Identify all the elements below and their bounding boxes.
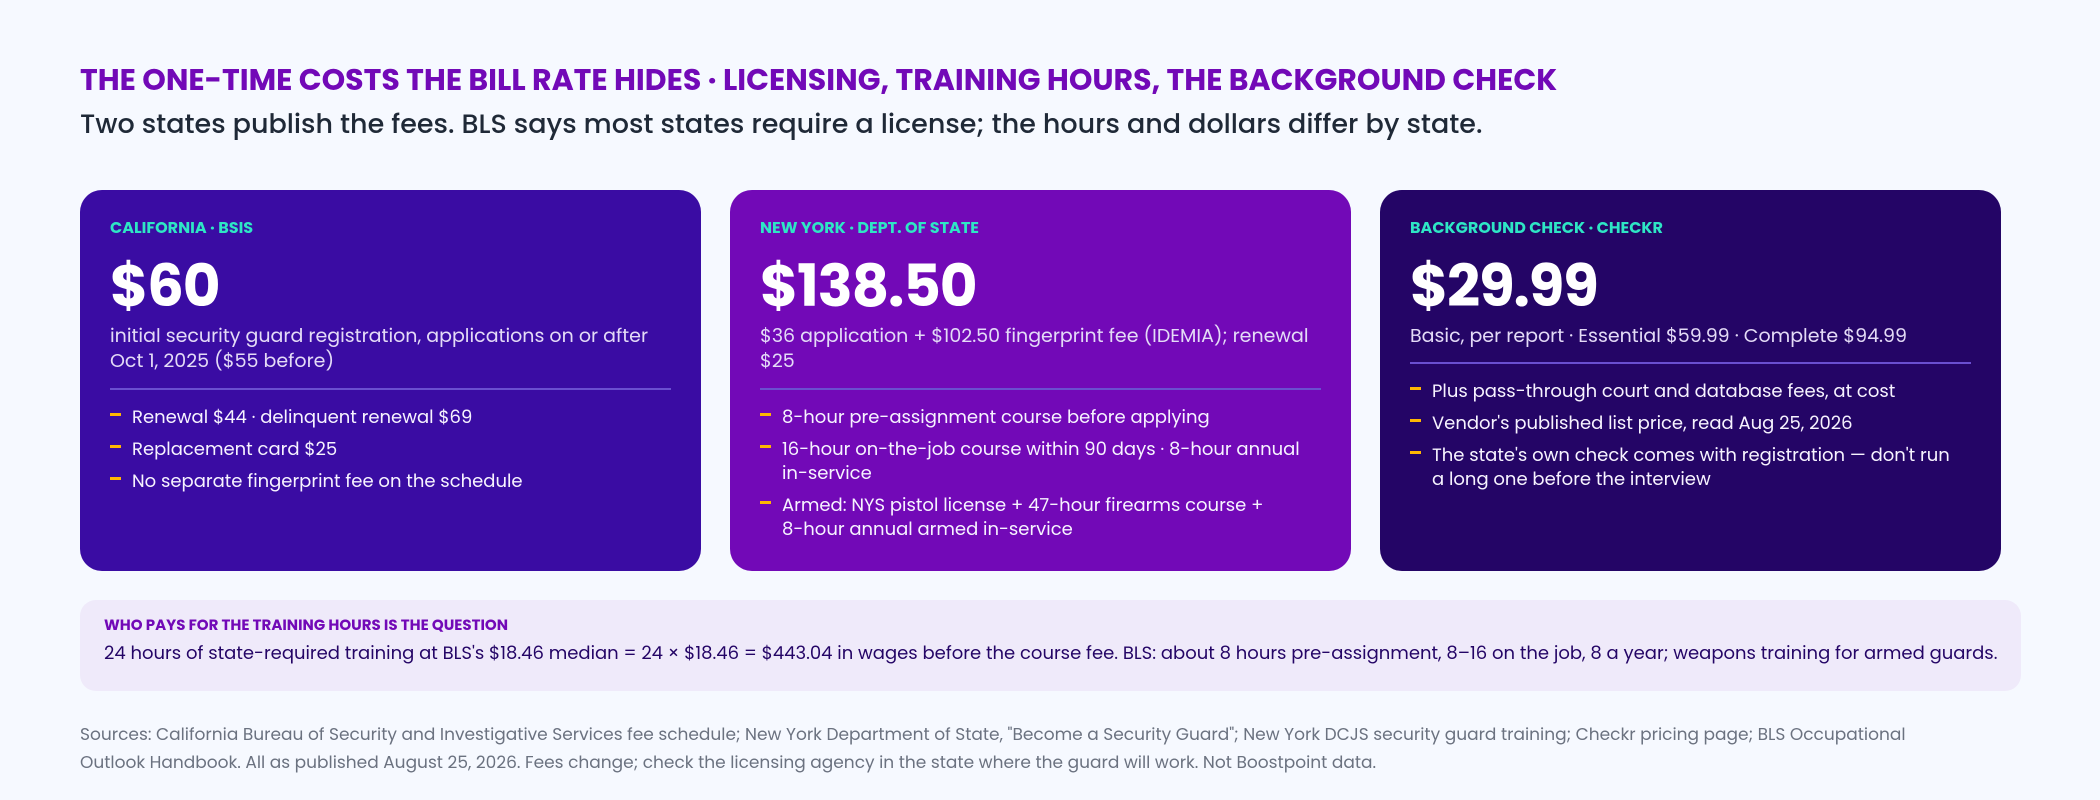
fee description: initial security guard registration, applications on or after <box>110 322 648 349</box>
fee description: $36 application + $102.50 fingerprint fee (IDEMIA); renewal <box>760 322 1308 349</box>
fee amount: $29.99 <box>1410 246 1598 327</box>
title: THE ONE-TIME COSTS THE BILL RATE HIDES · LICENSING, TRAINING HOURS, THE BACKGROUND CHECK <box>80 58 1557 101</box>
bullet: armed: 8-hour annual armed in-service <box>782 517 1073 542</box>
card label: CALIFORNIA · BSIS <box>110 216 253 239</box>
bullet: on-the-job: in-service <box>782 461 872 486</box>
bullet: renewal: Renewal $44 · delinquent renewal $69 <box>132 405 472 430</box>
bullet list <box>760 405 1300 542</box>
fee description: $25 <box>760 347 795 374</box>
card label: BACKGROUND CHECK · CHECKR <box>1410 216 1663 239</box>
sources note: Outlook Handbook. All as published August 25, 2026. Fees change; check the licensing agency in the state where the guard will work. Not Boostpoint data. <box>80 750 1376 774</box>
bullet: on-the-job: 16-hour on-the-job course within 90 days · 8-hour annual <box>782 437 1300 462</box>
panel: California BSIS <box>80 190 701 571</box>
bullet: replacement card: Replacement card $25 <box>132 437 337 462</box>
fee description <box>760 322 1308 374</box>
fee amount: $138.50 <box>760 246 976 327</box>
bullet: pre-assignment: 8-hour pre-assignment course before applying <box>782 405 1210 430</box>
bullet: armed <box>760 493 1263 542</box>
bullet: state check: The state's own check comes with registration — don't run <box>1432 443 1950 468</box>
callout: who pays for training <box>80 600 2021 691</box>
bullet: list price: Vendor's published list price, read Aug 25, 2026 <box>1432 411 1853 436</box>
fee description: Oct 1, 2025 ($55 before) <box>110 347 334 374</box>
bullet: armed: Armed: NYS pistol license + 47-hour firearms course + <box>782 493 1263 518</box>
subtitle: Two states publish the fees. BLS says most states require a license; the hours and dollars differ by state. <box>80 106 1482 143</box>
callout body: 24 hours of state-required training at BLS's $18.46 median = 24 × $18.46 = $443.04 in wages before the course fee. BLS: about 8 hours pre-assignment, 8–16 on the job, 8 a year; weapons training for armed guards. <box>104 641 1997 666</box>
panel: New York Dept. of State <box>730 190 1351 571</box>
fee description: Basic, per report · Essential $59.99 · Complete $94.99 <box>1410 322 1907 349</box>
bullet: state check <box>1410 443 1950 492</box>
callout heading: WHO PAYS FOR THE TRAINING HOURS IS THE QUESTION <box>104 615 508 636</box>
bullet list <box>1410 379 1950 492</box>
bullet: state check: a long one before the interview <box>1432 467 1711 492</box>
bullet: pass-through: Plus pass-through court and database fees, at cost <box>1432 379 1895 404</box>
fee description <box>110 322 648 374</box>
panel: Background check Checkr <box>1380 190 2001 571</box>
fee amount: $60 <box>110 246 219 327</box>
sources note: Sources: California Bureau of Security and Investigative Services fee schedule; New York Department of State, "Become a Security Guard"; New York DCJS security guard training; Checkr pricing page; BLS Occupational <box>80 722 1906 746</box>
bullet: fingerprint fee: No separate fingerprint fee on the schedule <box>132 469 523 494</box>
bullet: on-the-job <box>760 437 1300 486</box>
card label: NEW YORK · DEPT. OF STATE <box>760 216 979 239</box>
sources note <box>80 722 1906 774</box>
bullet list <box>110 405 523 494</box>
